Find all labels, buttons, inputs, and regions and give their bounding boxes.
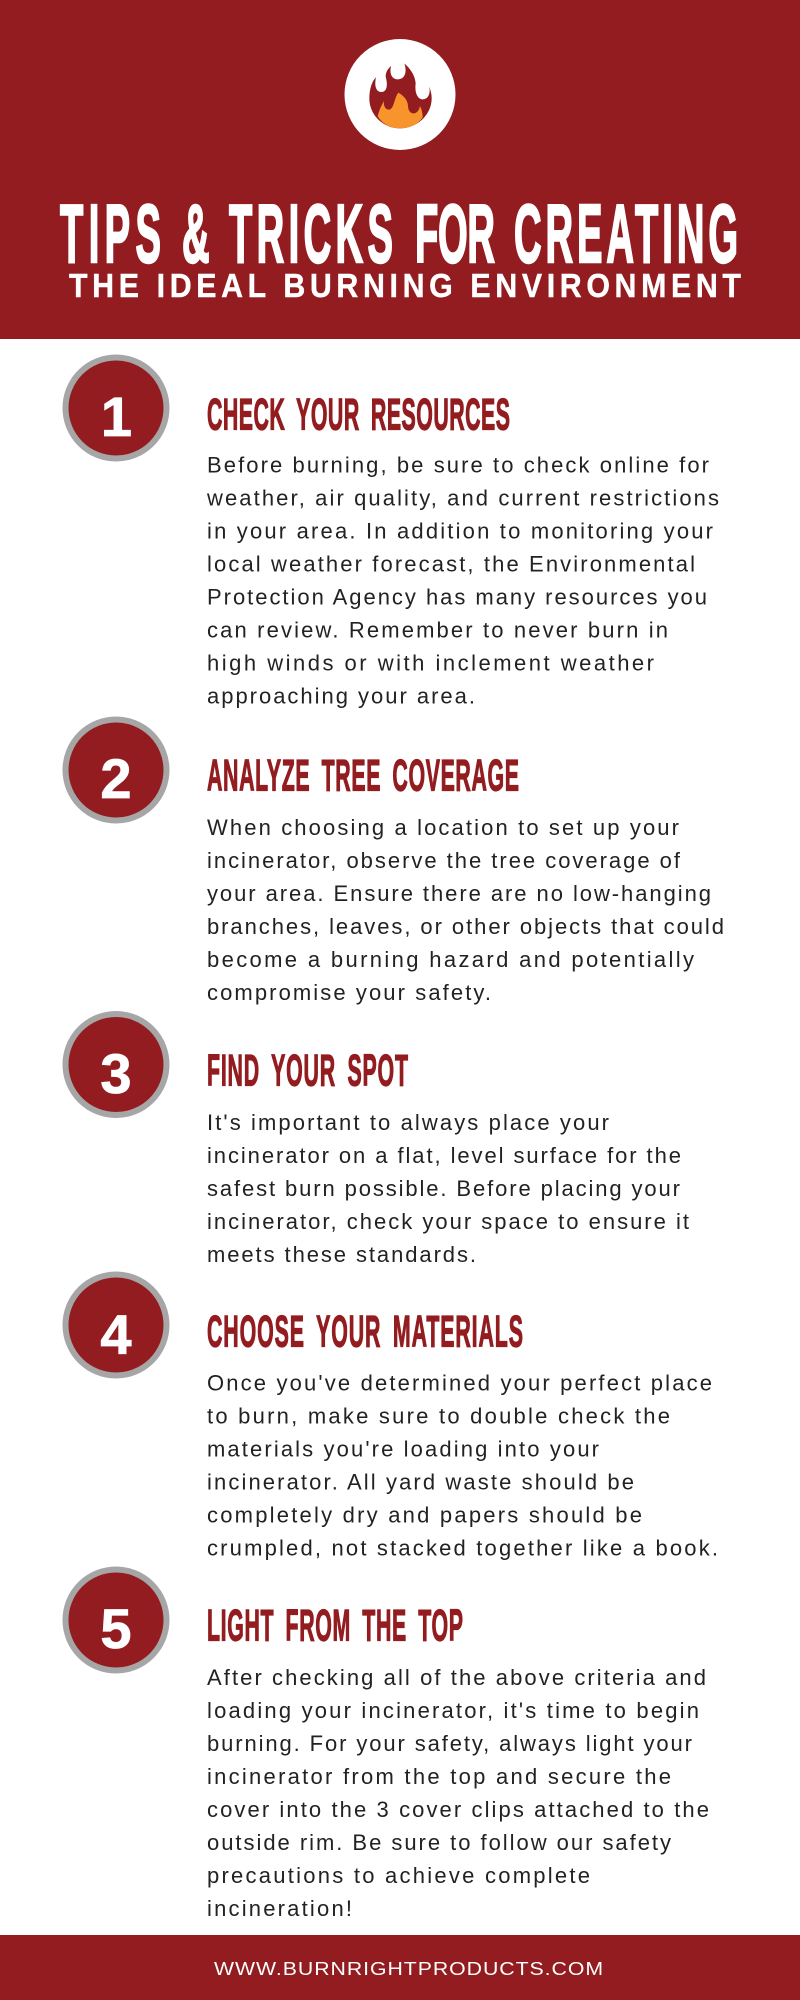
number badge 5	[66, 1570, 166, 1670]
body text 4	[207, 1371, 718, 1561]
body text 1: weather, air quality, and current restrictions	[206, 486, 719, 511]
title: FOR	[415, 187, 495, 280]
body text 4: crumpled, not stacked together like a book.	[207, 1536, 718, 1561]
body text 5: burning. For your safety, always light your	[207, 1731, 692, 1756]
step 4: choose your materials	[66, 1274, 718, 1561]
body text 1: high winds or with inclement weather	[207, 651, 654, 676]
title: &	[182, 187, 210, 280]
body text 2	[207, 815, 724, 1005]
title: TIPS	[60, 187, 161, 280]
body text 2: compromise your safety.	[207, 980, 491, 1005]
body text 4: incinerator. All yard waste should be	[207, 1470, 634, 1495]
footer banner	[0, 1935, 800, 2000]
title: TRICKS	[229, 187, 393, 280]
step 5: light from the top	[66, 1570, 709, 1921]
heading 5: LIGHT FROM THE TOP	[207, 1601, 463, 1651]
body text 3: incinerator, check your space to ensure it	[207, 1209, 689, 1234]
number badge 4: 4	[100, 1303, 132, 1366]
header banner	[0, 0, 800, 339]
body text 4: Once you've determined your perfect place	[207, 1371, 712, 1396]
body text 5: After checking all of the above criteria and	[207, 1665, 706, 1690]
body text 4: completely dry and papers should be	[207, 1503, 642, 1528]
number badge 1	[66, 358, 166, 458]
number badge 4	[66, 1274, 166, 1376]
title: CREATING	[514, 187, 738, 280]
number badge 1: 1	[101, 385, 132, 448]
heading 3: FIND YOUR SPOT	[207, 1046, 408, 1096]
body text 1: approaching your area.	[207, 684, 475, 709]
body text 5: incinerator from the top and secure the	[207, 1764, 671, 1789]
title	[60, 187, 738, 280]
body text 1: in your area. In addition to monitoring your	[207, 519, 713, 544]
body text 2: become a burning hazard and potentially	[207, 947, 694, 972]
number badge 3	[66, 1014, 166, 1115]
footer url: WWW.BURNRIGHTPRODUCTS.COM	[214, 1959, 603, 1980]
step 2: analyze tree coverage	[66, 720, 724, 1005]
body text 4: to burn, make sure to double check the	[207, 1404, 670, 1429]
body text 3: incinerator on a flat, level surface for the	[207, 1143, 681, 1168]
body text 5: loading your incinerator, it's time to begin	[207, 1698, 699, 1723]
heading 1: CHECK YOUR RESOURCES	[207, 390, 510, 440]
body text 1: Before burning, be sure to check online for	[207, 453, 709, 478]
body text 1: Protection Agency has many resources you	[207, 585, 707, 610]
body text 3: meets these standards.	[207, 1242, 476, 1267]
number badge 2	[66, 720, 166, 820]
body text 5	[207, 1665, 709, 1921]
subtitle: THE IDEAL BURNING ENVIRONMENT	[69, 267, 742, 304]
icon: flame in white circle	[344, 39, 456, 150]
body text 1: local weather forecast, the Environmental	[207, 552, 695, 577]
body text 1	[206, 453, 719, 709]
number badge 3: 3	[100, 1042, 132, 1105]
body text 3: It's important to always place your	[207, 1110, 609, 1135]
body text 2: When choosing a location to set up your	[207, 815, 679, 840]
step 3: find your spot	[66, 1014, 689, 1267]
body text 5: precautions to achieve complete	[207, 1863, 590, 1888]
body text 1: can review. Remember to never burn in	[207, 618, 668, 643]
body text 5: cover into the 3 cover clips attached to the	[207, 1797, 709, 1822]
body text 5: outside rim. Be sure to follow our safety	[207, 1830, 671, 1855]
step 1: check your resources	[66, 358, 719, 709]
heading 2: ANALYZE TREE COVERAGE	[207, 751, 519, 801]
body text 2: incinerator, observe the tree coverage of	[207, 848, 681, 873]
body text 4: materials you're loading into your	[207, 1437, 599, 1462]
body text 2: branches, leaves, or other objects that could	[207, 914, 724, 939]
body text 5: incineration!	[207, 1896, 352, 1921]
body text 2: your area. Ensure there are no low-hanging	[207, 881, 711, 906]
body text 3	[207, 1110, 689, 1267]
body text 3: safest burn possible. Before placing your	[207, 1176, 680, 1201]
number badge 5: 5	[100, 1597, 132, 1660]
heading 4: CHOOSE YOUR MATERIALS	[207, 1307, 523, 1357]
number badge 2: 2	[100, 747, 132, 810]
